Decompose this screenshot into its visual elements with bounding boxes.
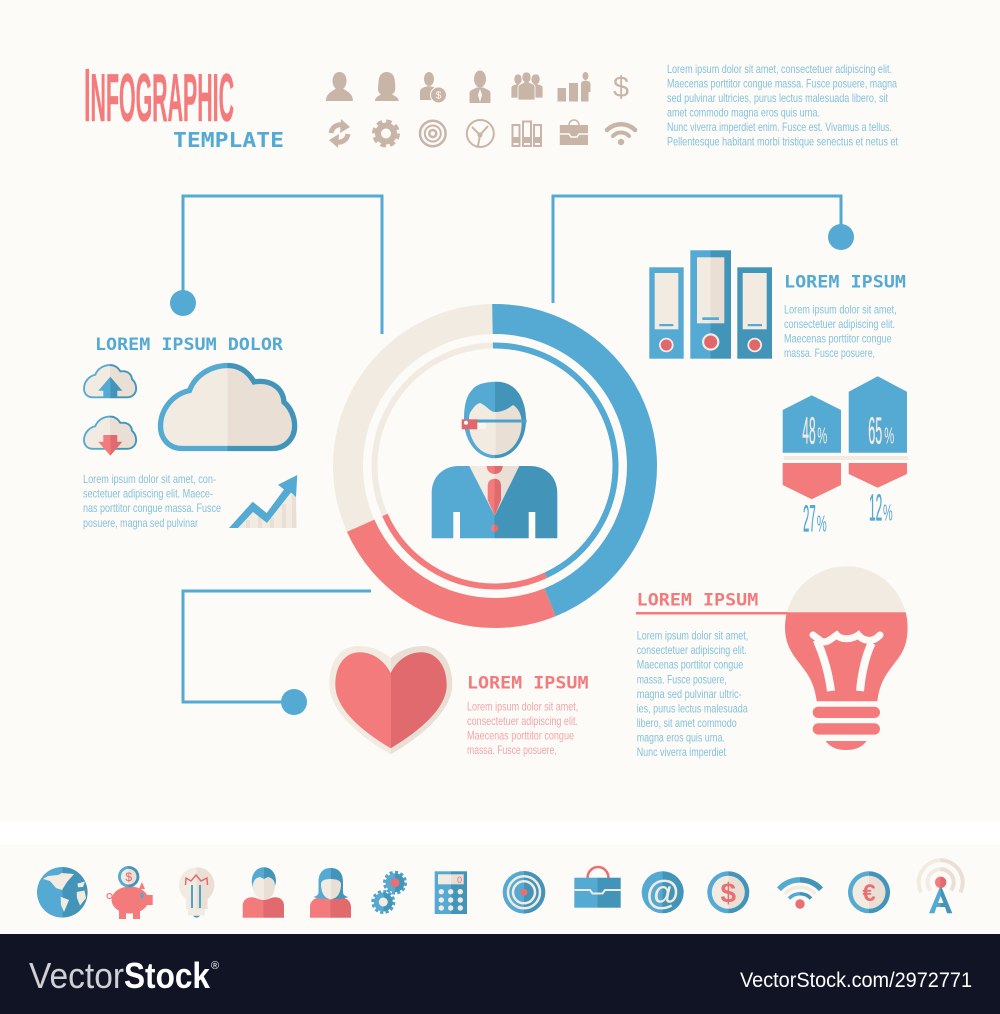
donut chart: [345, 316, 645, 616]
intro text block: Pellentesque habitant morbi tristique senectus et netus et: [667, 134, 898, 148]
binder left: [649, 267, 684, 359]
head and hair: [464, 382, 526, 458]
icon: gear: [374, 122, 398, 146]
icon: piggy bank: $: [125, 870, 132, 884]
bar 12%: %: [883, 500, 893, 526]
icon: calculator: [435, 871, 467, 914]
icon: man: [326, 72, 353, 101]
icon: cloud download: [84, 416, 136, 456]
bar 48%: [783, 395, 841, 453]
bar 12%: [849, 463, 907, 530]
icon: cloud upload: [84, 365, 136, 397]
tie: [487, 466, 503, 516]
icon: refresh: [329, 119, 350, 148]
growth arrow chart: [229, 475, 297, 528]
connector: bottom left: [183, 591, 371, 715]
top icon set: [326, 70, 635, 148]
text: INFOGRAPHIC: [84, 53, 234, 137]
face: [469, 403, 522, 455]
light bulb text: Lorem ipsum dolor sit amet,: [637, 628, 748, 642]
bar chart: percentages: [783, 376, 908, 541]
intro text block: Maecenas porttitor congue massa. Fusce posuere, magna: [667, 76, 897, 90]
light bulb text: ies, purus lectus malesuada: [637, 701, 748, 715]
heart text: consectetuer adipiscing elit.: [467, 714, 578, 728]
intro text block: sed pulvinar ultricies, purus lectus malesuada libero, sit: [667, 91, 888, 105]
icon: businessman with coin: [420, 72, 446, 103]
icon: man avatar: [243, 867, 284, 918]
cloud text: Lorem ipsum dolor sit amet, con-: [83, 472, 216, 486]
heart text: Lorem ipsum dolor sit amet,: [467, 700, 578, 714]
icon: at sign: @: [646, 874, 679, 912]
binders text: massa. Fusce posuere,: [784, 346, 875, 360]
light bulb text: [637, 628, 748, 759]
intro text block: Lorem ipsum dolor sit amet, consectetuer adipiscing elit.: [667, 62, 892, 76]
footer logo: ®: [211, 960, 219, 972]
heart text: [467, 700, 578, 757]
binders text: Lorem ipsum dolor sit amet,: [784, 302, 897, 316]
icon: wifi: [779, 880, 821, 909]
intro text block: [667, 62, 898, 148]
heading: heart: LOREM IPSUM: [467, 674, 589, 693]
icon: bars and man: [558, 72, 590, 102]
icon: light bulb: [785, 566, 908, 750]
light bulb text: Maecenas porttitor congue: [637, 658, 744, 672]
binders text: [784, 302, 897, 360]
light bulb text: libero, sit amet commodo: [637, 716, 737, 730]
binders text: consectetuer adipiscing elit.: [784, 317, 895, 331]
icon: wifi: [607, 124, 635, 145]
cloud text: posuere, magna sed pulvinar: [83, 516, 198, 530]
icon: woman: [375, 72, 399, 101]
footer logo: Vector: [29, 955, 124, 996]
icon: heart: [329, 646, 452, 754]
light bulb text: massa. Fusce posuere,: [637, 672, 727, 686]
intro text block: amet commodo magna eros quis urna.: [667, 106, 820, 120]
cloud text: nas porttitor congue massa. Fusce: [83, 501, 221, 515]
icon: small bulb: [179, 867, 214, 918]
heading: light bulb: LOREM IPSUM: [637, 591, 758, 610]
binders: [649, 250, 772, 359]
light bulb text: consectetuer adipiscing elit.: [637, 643, 747, 657]
footer logo: Stock: [124, 955, 211, 996]
icon: woman avatar: [310, 868, 351, 918]
bar 27%: [783, 463, 841, 541]
bar 12%: 12: [869, 488, 882, 530]
connector: top right: [553, 196, 854, 303]
icon: gears: [373, 873, 405, 912]
jacket: [432, 466, 557, 538]
icon: target: [503, 871, 545, 914]
light bulb text: magna sed pulvinar ultric-: [637, 687, 742, 701]
glasses: [462, 419, 527, 429]
title: TEMPLATE: [173, 128, 284, 152]
light bulb text: Nunc viverra imperdiet: [637, 745, 726, 759]
shirt: [469, 466, 519, 516]
heart text: Maecenas porttitor congue: [467, 728, 574, 742]
icon: man in suit: [470, 70, 490, 103]
binder right: [737, 267, 772, 359]
bottom icon strip: [37, 860, 963, 919]
icon: large cloud: [160, 366, 295, 448]
icon: binders: [512, 122, 541, 146]
heart text: massa. Fusce posuere,: [467, 743, 557, 757]
icon: dollar coin: [707, 871, 749, 913]
bar 48%: %: [817, 422, 827, 448]
icon: target: [420, 121, 446, 146]
binder middle: [690, 250, 731, 359]
footer bar: [0, 934, 1000, 1014]
icon: globe: [37, 867, 88, 918]
button: [491, 525, 498, 532]
bar 27%: %: [817, 511, 827, 537]
icon: piggy bank: [107, 866, 153, 919]
icon: calculator: 0: [457, 875, 462, 885]
cloud text: [83, 472, 221, 530]
icon: dollar coin: $: [721, 878, 737, 908]
title: [84, 53, 284, 152]
icon: group: [511, 72, 543, 100]
icon: briefcase: [560, 120, 588, 145]
cloud text: sectetuer adipiscing elit. Maece-: [83, 486, 213, 500]
icon: dollar: $: [613, 71, 629, 104]
intro text block: Nunc viverra imperdiet enim. Fusce est. Vivamus a tellus.: [667, 120, 892, 134]
icon: euro coin: [848, 871, 890, 913]
heading: cloud section: LOREM IPSUM DOLOR: [95, 335, 283, 354]
footer logo: [29, 955, 219, 996]
binders text: Maecenas porttitor congue: [784, 332, 892, 346]
person with smart glasses: [432, 382, 557, 538]
heading: binders: LOREM IPSUM: [784, 273, 906, 292]
bar 65%: %: [884, 422, 894, 448]
bar 27%: 27: [803, 499, 816, 541]
icon: briefcase: [574, 867, 621, 908]
icon: euro coin: €: [862, 880, 876, 907]
connector: top left: [170, 196, 382, 334]
bar 65%: 65: [868, 410, 882, 452]
bar 65%: [849, 376, 907, 453]
icon: clock: [467, 120, 494, 147]
icon: radio tower: [919, 860, 963, 913]
icon: businessman with coin: $: [436, 90, 442, 102]
light bulb text: magna eros quis urna.: [637, 730, 725, 744]
footer url: VectorStock.com/2972771: [740, 969, 972, 992]
bar 48%: 48: [802, 410, 816, 452]
